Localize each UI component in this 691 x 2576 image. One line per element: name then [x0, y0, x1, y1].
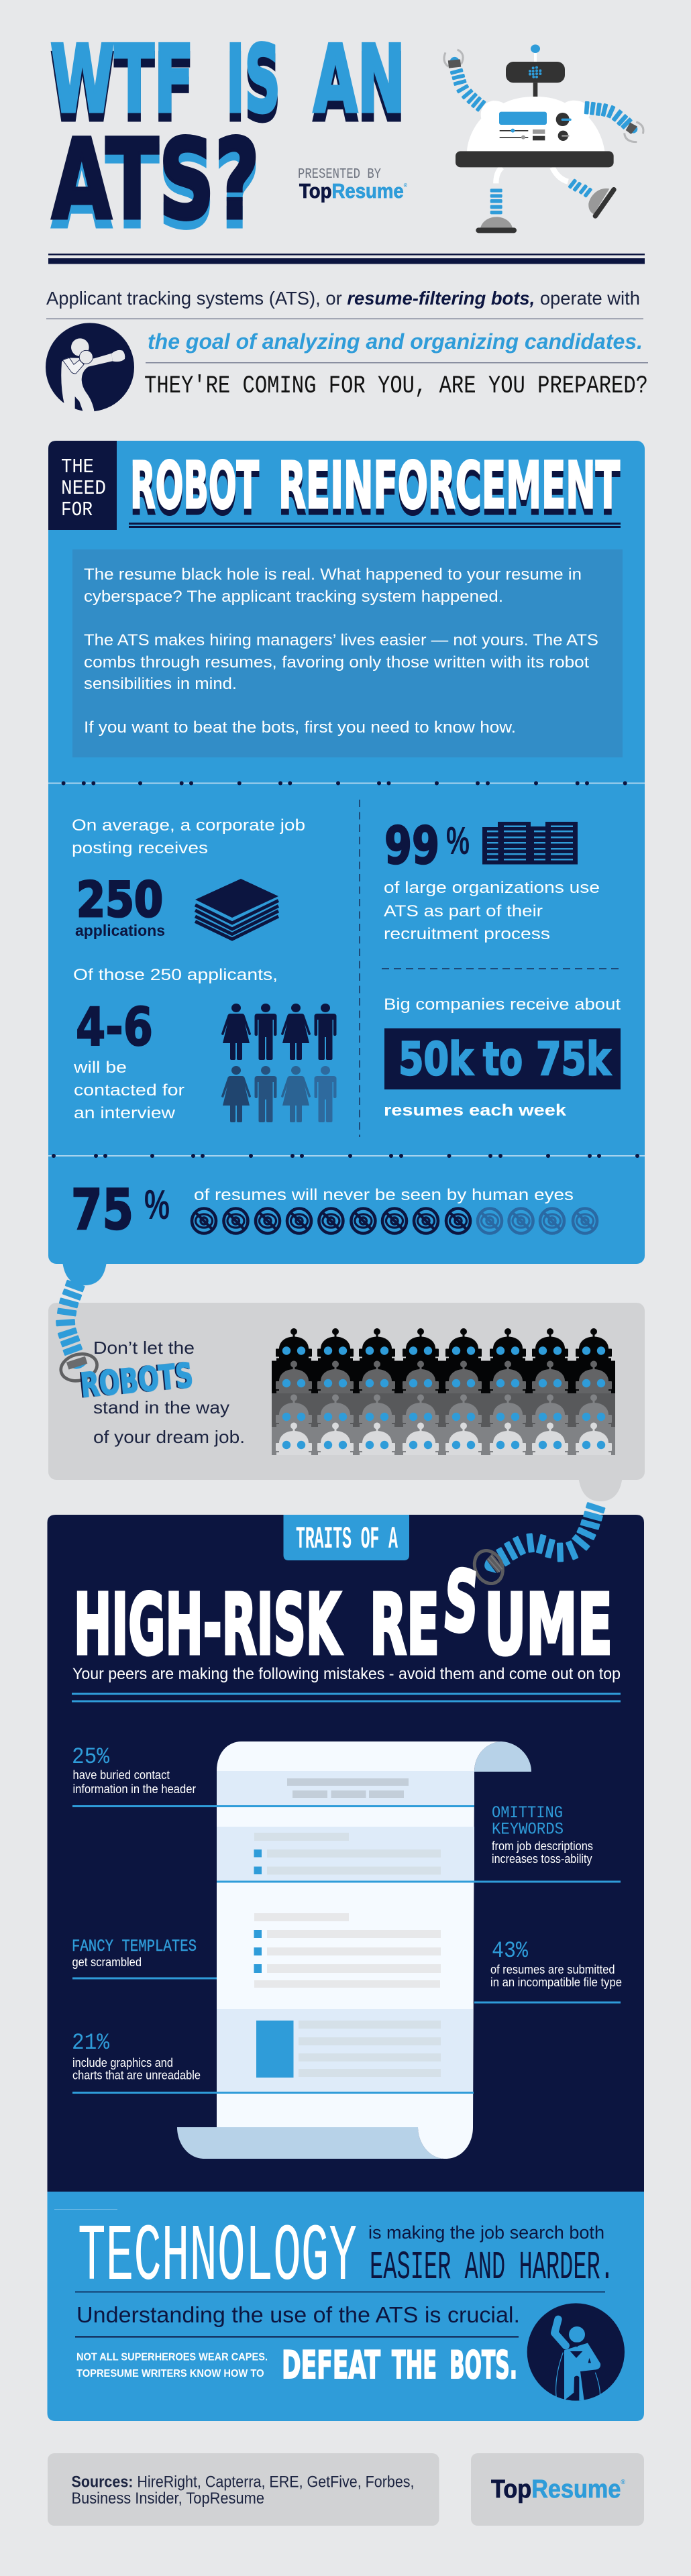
intro text box: If you want to beat the bots, first you need to know how.	[84, 718, 516, 737]
intro text box: The resume black hole is real. What happened to your resume in	[84, 566, 582, 584]
text: don't let: Don’t let the	[93, 1338, 195, 1358]
icon: superhero	[527, 2303, 625, 2401]
panel background	[48, 441, 645, 1264]
callout: 21%: include graphics and	[72, 2055, 173, 2070]
logo: TopResume header: ®	[404, 182, 407, 189]
stat: 99%: 99	[384, 816, 439, 876]
icon: office buildings	[482, 822, 578, 864]
title: WTF IS AN	[50, 25, 405, 133]
callout: 25%: have buried contact	[72, 1768, 170, 1782]
stat: 75%: 75	[71, 1177, 134, 1242]
panel: don't let the robots	[48, 1303, 645, 1501]
panel: footer logo	[471, 2453, 644, 2526]
word: technology: TECHNOLOGY	[78, 2212, 357, 2304]
stat: 75%: %	[144, 1182, 170, 1228]
heading: high-risk resume: S	[439, 1552, 482, 1652]
text: not all superheroes	[76, 2352, 268, 2379]
text: making the job search: is making the job search both	[368, 2222, 604, 2243]
stat: 4-6 contacted: 4-6	[76, 998, 153, 1058]
heading: robot reinforcement: ROBOT	[130, 448, 259, 523]
heading: robot reinforcement	[130, 448, 620, 523]
panel: sources: Sources: HireRight, Capterra, ERE, GetFive, Forbes,	[71, 2473, 415, 2491]
double rule under title	[48, 254, 645, 264]
callout: 43%	[490, 1939, 622, 1989]
icon: people rows	[221, 1004, 337, 1122]
callout: fancy templates: FANCY TEMPLATES	[72, 1937, 197, 1956]
heading: high-risk resume: RE	[370, 1576, 439, 1674]
robot crowd	[272, 1328, 615, 1455]
callout: omitting keywords: increases toss-ability	[492, 1851, 592, 1866]
panel: robot reinforcement	[48, 441, 645, 1285]
text: large organizations: of large organizations use	[384, 879, 600, 897]
intro sentence: Applicant tracking systems (ATS), or resume-filtering bots, operate with	[46, 288, 640, 309]
panel: don't let the robots: stand in the way	[93, 1397, 229, 1417]
title: WTF IS AN: IS	[226, 25, 280, 133]
presented by label: PRESENTED BY	[298, 167, 381, 182]
callout: 43%: 43%	[492, 1939, 529, 1964]
heading: high-risk resume: UME	[484, 1576, 613, 1674]
panel background	[47, 2192, 644, 2421]
stat: 4-6 contacted: an interview	[74, 1104, 175, 1122]
text: not all superheroes: TOPRESUME WRITERS KNOW HOW TO	[76, 2368, 264, 2379]
text: not all superheroes: NOT ALL SUPERHEROES WEAR CAPES.	[76, 2352, 268, 2363]
stat: 4-6 contacted: will be	[73, 1059, 127, 1077]
logo: TopResume header: TopResume	[299, 179, 413, 203]
stat: 50k to 75k: resumes each week	[384, 1102, 566, 1120]
panel: don't let the robots: of your dream job.	[93, 1427, 245, 1447]
callout: 25%	[72, 1745, 196, 1796]
stat: 50k to 75k: to	[483, 1033, 523, 1086]
text: large organizations: ATS as part of their	[384, 902, 543, 920]
robot illustration	[444, 44, 643, 233]
word: robots: ROBOTS	[79, 1356, 195, 1405]
stat: 50k to 75k: 75k	[536, 1033, 611, 1086]
robot arm two	[470, 1502, 606, 1588]
callout: 25%: 25%	[72, 1745, 110, 1770]
panel: sources: Business Insider, TopResume	[71, 2489, 264, 2508]
callout: omitting keywords: KEYWORDS	[492, 1819, 564, 1839]
panel background	[47, 1515, 644, 2192]
stat: 4-6 contacted: Of those 250 applicants,	[73, 966, 278, 984]
stat: 250 applications: applications	[75, 922, 165, 939]
panel: sources	[48, 2453, 439, 2526]
tab: the need for: THE	[61, 455, 94, 479]
panel: high-risk resume	[47, 1502, 644, 2192]
intro text box: combs through resumes, favoring only those written with its robot	[84, 653, 589, 672]
stat: 75%	[71, 1177, 574, 1242]
callout: fancy templates: get scrambled	[72, 1955, 142, 1969]
stat: 250 applications	[72, 816, 305, 939]
stat: 4-6 contacted	[73, 966, 278, 1122]
callout: fancy templates	[72, 1937, 197, 1969]
text: making the job search	[368, 2222, 614, 2290]
text: defeat the bots: THE	[392, 2343, 437, 2387]
callout: omitting keywords: OMITTING	[492, 1803, 563, 1823]
intro text box: cyberspace? The applicant tracking system happened.	[84, 588, 503, 606]
stat: 99%: %	[446, 819, 470, 863]
text: defeat the bots: BOTS.	[449, 2343, 517, 2387]
text: large organizations: recruitment process	[384, 925, 550, 943]
tab: traits of a	[283, 1515, 409, 1560]
panel: footer logo: TopResume	[491, 2475, 631, 2504]
tab: the need for: NEED	[61, 477, 106, 500]
text: understanding: Understanding the use of the ATS is crucial.	[76, 2302, 520, 2327]
callout: omitting keywords	[492, 1803, 593, 1866]
stat: 4-6 contacted: contacted for	[74, 1081, 184, 1099]
rule above question	[146, 362, 648, 364]
panel tail	[62, 1261, 107, 1285]
panel: technology conclusion	[47, 2192, 644, 2421]
subheading: peers: Your peers are making the following mistakes - avoid them and come out on top	[72, 1665, 621, 1683]
callout: 21%: charts that are unreadable	[72, 2068, 201, 2082]
stat: 250 applications: posting receives	[72, 839, 208, 857]
callout: 43%: of resumes are submitted	[490, 1962, 615, 1976]
title: WTF IS AN: AN	[313, 25, 405, 133]
tab: the need for	[48, 441, 117, 530]
stat: 250 applications: On average, a corporate job	[72, 816, 305, 835]
callout: 21%: 21%	[72, 2031, 110, 2056]
tab: the need for: FOR	[61, 498, 93, 522]
callout: omitting keywords: from job descriptions	[492, 1839, 593, 1853]
panel tail and background	[578, 1476, 623, 1501]
goal sentence: the goal of analyzing and organizing candidates.	[148, 329, 643, 354]
icon: boxer	[46, 323, 134, 413]
stat: 250 applications: 250	[76, 871, 163, 928]
icon: crossed eyes row	[192, 1209, 597, 1233]
callout: 43%: in an incompatible file type	[490, 1975, 622, 1989]
robot arm one	[56, 1279, 100, 1385]
text: large organizations	[384, 879, 600, 943]
stat: 50k to 75k: 50k	[398, 1033, 474, 1086]
intro text box: The ATS makes hiring managers’ lives easier — not yours. The ATS	[84, 631, 598, 649]
intro text box	[72, 549, 623, 757]
title: WTF IS AN: WTF	[50, 25, 194, 133]
title: ATS?: ATS?	[52, 115, 260, 244]
callout: 25%: information in the header	[72, 1782, 196, 1796]
tab: traits of a: TRAITS OF A	[296, 1522, 398, 1557]
intro text box: sensibilities in mind.	[84, 675, 237, 693]
stat: 75%: of resumes will never be seen by human eyes	[194, 1186, 574, 1204]
panel: footer logo: ®	[621, 2479, 626, 2486]
stat: 50k to 75k	[384, 996, 621, 1120]
stat: 50k to 75k: Big companies receive about	[384, 996, 621, 1014]
text: defeat the bots	[282, 2343, 517, 2387]
text: defeat the bots: DEFEAT	[282, 2343, 380, 2387]
callout: 21%	[72, 2031, 201, 2082]
rule above goal	[46, 318, 643, 319]
illustration: resume scroll	[177, 1741, 531, 2159]
heading: high-risk resume: HIGH-RISK	[74, 1576, 342, 1674]
icon: resume stack	[195, 879, 278, 939]
